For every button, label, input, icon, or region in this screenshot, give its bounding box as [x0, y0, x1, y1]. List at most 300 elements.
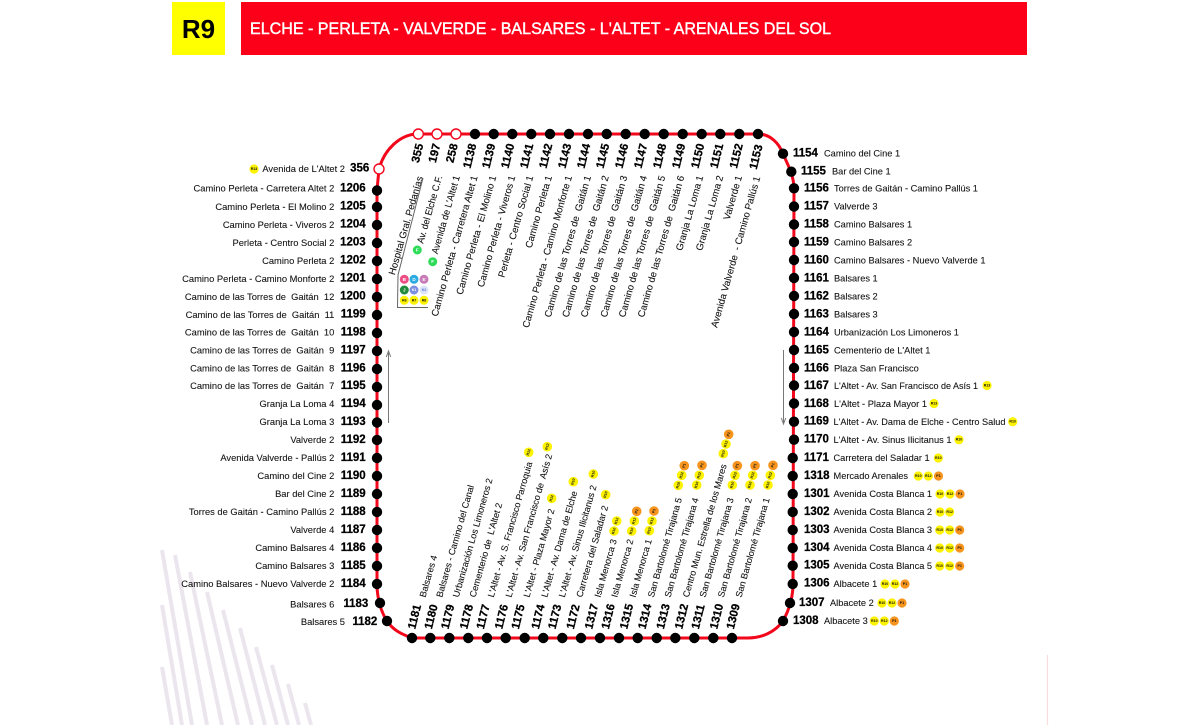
stop 1172: 1172: [565, 603, 583, 630]
stop 1159: 1159: [804, 236, 829, 248]
stop dots bottom: [407, 633, 737, 643]
stop 1187: Valverde 4: [290, 525, 334, 535]
stop 1313: R12: [696, 472, 702, 479]
stop 1202: 1202: [340, 254, 366, 266]
stop 1169: R10: [1009, 420, 1016, 424]
stop 1147: Camino de las Torres de Gaitán 4: [599, 174, 650, 319]
stop 1152: Valverde 1: [722, 174, 745, 221]
stop 1306: [788, 578, 910, 590]
stop 1195: [190, 380, 382, 392]
stop 1305: R10: [936, 564, 943, 568]
stop 1152: [722, 129, 746, 221]
stop 1180: 1180: [423, 603, 441, 630]
stop 1179: Urbanización Los Limoneros 2: [451, 477, 495, 598]
stop 1313: R10: [694, 481, 700, 489]
stop 1201: Camino Perleta - Camino Monforte 2: [182, 274, 334, 284]
stop 1188: 1188: [341, 506, 366, 518]
stop 1190: [257, 470, 382, 482]
stop 1303: R12: [946, 528, 953, 532]
stop 1172: R10: [603, 491, 609, 498]
stop 1155: [786, 166, 891, 178]
stop 1150: 1150: [690, 143, 707, 170]
stop 1176: 1176: [493, 603, 511, 630]
top row stops: [387, 129, 766, 329]
stop 1156: Torres de Gaitán - Camino Pallús 1: [834, 184, 978, 194]
stop 1301: R12: [947, 492, 953, 496]
stop 1186: Camino Balsares 4: [255, 543, 334, 553]
stop 1191: Avenida Valverde - Pallús 2: [220, 453, 334, 463]
stop 1163: Balsares 3: [834, 310, 878, 320]
stop 1167: L'Altet - Av. San Francisco de Asís 1: [834, 381, 978, 391]
stop 1310: R10: [747, 481, 753, 489]
stop 1206: Camino Perleta - Carretera Altet 2: [194, 184, 334, 194]
hospital connections box: [398, 178, 428, 308]
stop 1307: 1307: [799, 597, 825, 609]
title banner: ELCHE - PERLETA - VALVERDE - BALSARES - L'ALTET - ARENALES DEL SOL: [250, 20, 831, 38]
route badge R9: R9: [182, 14, 215, 44]
stop 1201: [182, 272, 382, 284]
stop 1304: R10: [936, 546, 943, 550]
hospital connections box: J: [403, 288, 406, 292]
stop 1312: P1: [726, 432, 731, 437]
stop 1159: Camino Balsares 2: [834, 238, 912, 248]
stop 1306: Albacete 1: [834, 579, 877, 589]
stop 356: R13: [251, 167, 257, 171]
stop 356: [249, 162, 384, 174]
stop 1174: 1174: [530, 603, 548, 630]
hospital connections box: K1: [412, 288, 416, 292]
stop 1172: Carretera del Saladar 2: [574, 504, 610, 598]
stop 1170: L'Altet - Av. Sinus Ilicitanus 1: [834, 435, 952, 445]
stop 1309: P1: [770, 463, 776, 468]
stop 1165: [789, 344, 930, 356]
stop 1147: 1147: [633, 143, 650, 170]
stop 1311: [690, 461, 742, 630]
stop 1307: R12: [889, 601, 895, 605]
stop 1163: 1163: [804, 308, 829, 320]
stop 1177: [475, 448, 535, 630]
stop 1189: Bar del Cine 2: [275, 489, 334, 499]
stop 1158: [789, 218, 912, 230]
stop 1164: Urbanización Los Limoneros 1: [834, 328, 959, 338]
stop 1164: [789, 326, 959, 338]
stop 1145: Camino de las Torres de Gaitán 2: [561, 174, 612, 319]
stop 1198: 1198: [341, 326, 366, 338]
stop 1205: 1205: [340, 201, 366, 213]
stop 1316: P1: [634, 509, 639, 514]
stop 1182: [301, 616, 392, 628]
stop 1313: P1: [699, 463, 705, 468]
stop 1178: 1178: [458, 603, 476, 630]
stop 1191: 1191: [341, 452, 366, 464]
stop 355 Hospital: 355: [410, 142, 426, 164]
stop 1177: R12: [526, 449, 532, 456]
stop 1167: 1167: [804, 380, 829, 392]
stop 1154: [778, 148, 900, 160]
stop 1151: 1151: [709, 142, 726, 170]
stop 1197: [190, 344, 382, 356]
stop 1311: 1311: [690, 603, 708, 630]
stop 1316: R10: [629, 527, 635, 535]
stop 1307: R10: [879, 601, 885, 605]
stop 1181: [406, 554, 439, 630]
stop 1310: San Bartolomé Tirajana 2: [716, 497, 754, 598]
stop 1178: Cementerio de L'Altet 2: [468, 502, 504, 598]
stop 197: Av. del Elche C.F.: [415, 174, 445, 245]
stop 1184: 1184: [341, 578, 366, 590]
stop 1304: 1304: [804, 542, 830, 554]
hospital connections box: E: [422, 277, 426, 282]
stop 1188: Torres de Gaitán - Camino Pallús 2: [189, 507, 334, 517]
stop 1168: 1168: [804, 398, 830, 410]
stop 1168: L'Altet - Plaza Mayor 1: [834, 399, 927, 409]
stop 1199: [186, 308, 382, 320]
hospital connections box: R8: [422, 298, 426, 302]
stop 1305: P1: [957, 564, 962, 568]
right column stops: [778, 148, 1017, 627]
stop 1173: R10: [590, 470, 596, 478]
stop 1314: R10: [675, 482, 681, 489]
stop 1318: R10: [915, 474, 922, 478]
stop 1315: [618, 506, 659, 630]
stop 1138: Camino Perleta - Carretera Altet 1: [430, 174, 481, 318]
stop 1176: R12: [544, 443, 550, 450]
stop 1200: Camino de las Torres de Gaitán 12: [185, 292, 334, 302]
stop 1303: R10: [936, 528, 943, 532]
stop 1311: San Bartolomé Tirajana 3: [698, 497, 736, 598]
stop 1204: Camino Perleta - Viveros 2: [223, 220, 334, 230]
stop 1141: 1141: [519, 142, 536, 170]
stop 1199: Camino de las Torres de Gaitán 11: [186, 310, 334, 320]
stop 1185: 1185: [341, 560, 366, 572]
stop 1158: 1158: [804, 218, 830, 230]
stop 1305: 1305: [804, 560, 830, 572]
stop 1311: P1: [735, 463, 740, 468]
stop 1186: 1186: [341, 542, 366, 554]
route line: [377, 134, 794, 638]
stop 1181: 1181: [406, 603, 424, 630]
stop 1309: 1309: [725, 603, 743, 630]
stop 1194: 1194: [341, 398, 366, 410]
stop 1306: 1306: [804, 578, 830, 590]
stop 1308: [778, 615, 899, 627]
stop 1167: [789, 380, 992, 392]
stop 1162: Balsares 2: [834, 292, 878, 302]
stop 1192: Valverde 2: [290, 435, 334, 445]
stop 1186: [255, 542, 382, 554]
stop 1194: Granja La Loma 4: [260, 399, 334, 409]
stop 1312: R10: [720, 450, 726, 457]
stop 1176: [493, 442, 554, 630]
stop 1161: [789, 272, 878, 284]
stop 1307: Albacete 2: [830, 598, 874, 608]
stop 1172: [565, 490, 610, 630]
stop 1192: [290, 434, 382, 446]
stop 355 Hospital: [387, 129, 426, 276]
stop 1312: Centro Mun. Estrella de los Mares: [681, 463, 729, 598]
route badge R9: [172, 2, 225, 55]
stop 1312: 1312: [673, 603, 691, 630]
stop 1202: Camino Perleta 2: [262, 256, 334, 266]
stop 1166: 1166: [804, 362, 829, 374]
stop 1195: 1195: [341, 380, 366, 392]
stop 355 Hospital: Hospital Gral. Pedanías: [387, 175, 426, 276]
stop 1308: 1308: [793, 615, 819, 627]
stop 258: F: [431, 259, 434, 264]
direction arrow up: [386, 351, 391, 423]
stop 1303: Avenida Costa Blanca 3: [834, 525, 932, 535]
stop 1187: 1187: [341, 524, 366, 536]
stop 1171: 1171: [804, 452, 830, 464]
stop 1153: Avenida Valverde - Camino Pallús 1: [709, 175, 763, 329]
stop 1308: Albacete 3: [824, 616, 868, 626]
stop 1301: R10: [937, 492, 943, 496]
stop 1148: 1148: [652, 142, 669, 170]
stop 1193: 1193: [341, 416, 366, 428]
stop 1204: [223, 219, 382, 231]
stop 1310: P1: [752, 463, 758, 468]
stop 1197: 1197: [341, 344, 366, 356]
stop 1144: 1144: [576, 142, 593, 170]
stop 1177: L'Altet - Av. S. Francisco Parroquia: [486, 460, 535, 598]
stop 1303: P1: [957, 528, 962, 532]
stop 1304: P1: [957, 546, 962, 550]
stop 1308: R12: [881, 619, 888, 623]
stop 1316: R12: [631, 517, 637, 525]
stop 356: 356: [350, 162, 369, 174]
stop 1179: [440, 477, 495, 630]
stop 1192: 1192: [341, 434, 366, 446]
stop 1311: R12: [732, 472, 738, 479]
stop 1156: [789, 182, 978, 194]
stop 1138: 1138: [462, 142, 479, 170]
stop 1157: Valverde 3: [834, 202, 878, 212]
stop 1198: Camino de las Torres de Gaitán 10: [185, 328, 334, 338]
stop 1187: [290, 524, 382, 536]
stop 1206: [194, 182, 382, 196]
stop 1311: R10: [729, 481, 735, 489]
stop 1190: 1190: [341, 470, 366, 482]
stop 1318: R12: [925, 474, 932, 478]
stop 1316: Isla Menorca 2: [609, 538, 636, 598]
stop 1151: [694, 129, 726, 252]
stop 1193: [260, 416, 382, 428]
stop 1309: R10: [765, 481, 771, 489]
stop 1175: L'Altet - Plaza Mayor 2: [522, 508, 557, 598]
stop 1181: Balsares 4: [418, 554, 439, 598]
hospital connections box: D: [412, 277, 416, 282]
stop 1170: 1170: [804, 434, 829, 446]
stop 1306: P1: [903, 582, 907, 586]
stop 1160: [789, 254, 986, 266]
stop 1152: 1152: [728, 143, 746, 170]
stop 1178: [458, 502, 504, 630]
stop 1195: Camino de las Torres de Gaitán 7: [190, 381, 334, 391]
stop 1304: R12: [946, 546, 953, 550]
stop 1168: [789, 398, 939, 410]
stop 1200: [185, 290, 382, 302]
stop 1318: [788, 470, 943, 482]
stop 1170: R10: [956, 438, 962, 442]
stop 1173: [547, 469, 599, 630]
stop 1308: R10: [871, 619, 878, 623]
stop 1157: 1157: [804, 200, 829, 212]
stop 1303: 1303: [804, 524, 830, 536]
stop 1153: 1153: [748, 144, 766, 171]
stop 1306: R10: [882, 582, 888, 586]
stop 1173: L'Altet - Av. Sinus Ilicitanus 2: [557, 484, 599, 598]
stop 1155: Bar del Cine 1: [832, 167, 891, 177]
stop 1315: Isla Menorca 1: [628, 538, 654, 598]
stop 1196: Camino de las Torres de Gaitán 8: [190, 364, 334, 374]
stop 1305: Avenida Costa Blanca 5: [834, 561, 932, 571]
stop 1155: 1155: [801, 166, 827, 178]
stop 1169: L'Altet - Av. Dama de Elche - Centro Salud: [834, 417, 1006, 427]
stop 1139: Camino Perleta - El Molino 1: [455, 174, 499, 296]
stop 1201: 1201: [340, 272, 366, 284]
stop 1317: R10: [611, 527, 617, 535]
stop 1196: 1196: [341, 362, 366, 374]
stop 1315: P1: [651, 508, 657, 514]
stop 1317: R12: [614, 517, 620, 525]
stop 1164: 1164: [804, 326, 830, 338]
stop 1205: Camino Perleta - El Molino 2: [215, 202, 334, 212]
left column stops: [181, 162, 392, 628]
stop 1314: San Bartolomé Tirajana 5: [646, 497, 684, 598]
stop 1142: [524, 129, 555, 249]
stop 1145: 1145: [595, 142, 612, 170]
stop 1171: R10: [935, 456, 942, 460]
stop 1309: [725, 460, 778, 630]
stop 1318: P1: [936, 474, 941, 478]
stop 1190: Camino del Cine 2: [257, 471, 334, 481]
stop 1313: San Bartolomé Tirajana 4: [663, 497, 701, 598]
stop 1301: Avenida Costa Blanca 1: [834, 489, 932, 499]
stop 1185: [255, 560, 382, 572]
stop 1182: Balsares 5: [301, 617, 345, 627]
stop 1305: R12: [946, 564, 953, 568]
stop 1302: R12: [946, 510, 953, 514]
stop 1173: 1173: [547, 603, 564, 630]
stop 1197: Camino de las Torres de Gaitán 9: [190, 346, 334, 356]
stop 1165: Cementerio de L'Altet 1: [834, 346, 930, 356]
stop 1143: 1143: [557, 143, 574, 170]
stop 1310: [708, 461, 760, 630]
stop 1150: [674, 129, 707, 252]
stop 1165: 1165: [804, 344, 830, 356]
bottom row stops: [406, 430, 778, 643]
stop 1315: R10: [646, 527, 652, 534]
stop 1314: [637, 461, 689, 630]
stop 1183: [290, 598, 385, 610]
stop 1148: Camino de las Torres de Gaitán 5: [617, 174, 668, 319]
stop 1302: [788, 506, 954, 518]
stop 1179: 1179: [440, 603, 457, 630]
hospital connections box: R7: [412, 298, 416, 302]
stop 1144: Camino de las Torres de Gaitán 1: [543, 174, 594, 319]
stop 1141: [497, 129, 536, 279]
stop 1304: [788, 542, 964, 554]
stop 258: 258: [445, 142, 461, 164]
stop 1168: R13: [931, 402, 937, 406]
stop 1303: [788, 524, 964, 536]
stop 1171: Carretera del Saladar 1: [834, 453, 930, 463]
stop 1307: P1: [900, 601, 904, 605]
stop 1312: R12: [723, 440, 729, 448]
stop 1167: R13: [984, 384, 990, 388]
stop 1317: 1317: [583, 603, 601, 630]
stop 1202: [262, 254, 382, 266]
stop 1309: San Bartolomé Tirajana 1: [734, 497, 772, 598]
title banner: [241, 2, 1027, 55]
stop 1169: [789, 416, 1017, 428]
stop 1154: 1154: [793, 148, 819, 160]
stop 1166: [789, 362, 919, 374]
stop 1161: Balsares 1: [834, 274, 878, 284]
stop 1318: Mercado Arenales: [834, 471, 908, 481]
stop 1307: [785, 597, 907, 609]
stop 1184: [181, 578, 382, 590]
stop 1182: 1182: [352, 616, 377, 628]
stop 1175: 1175: [510, 603, 528, 630]
stop 1304: Avenida Costa Blanca 4: [834, 543, 932, 553]
stop 1183: Balsares 6: [290, 600, 334, 610]
stop 1149: 1149: [671, 143, 688, 170]
stop 1301: 1301: [804, 488, 830, 500]
stop 258: Avenida de L'Altet 1: [430, 174, 463, 255]
stop 1313: 1313: [655, 603, 673, 630]
stop 1158: Camino Balsares 1: [834, 220, 912, 230]
stop 1203: 1203: [340, 237, 366, 249]
direction arrow down: [781, 350, 786, 424]
stop 1312: [673, 430, 734, 630]
stop 1166: Plaza San Francisco: [834, 364, 919, 374]
stop 1176: L'Altet - Av. San Francisco de Asís 2: [504, 453, 554, 598]
stop 1140: 1140: [500, 143, 517, 170]
stop 1142: Camino Perleta 1: [524, 174, 555, 249]
stop 1180: Balsares - Camino del Canal: [434, 484, 476, 598]
stop 1188: [189, 506, 382, 518]
stop 1157: [789, 200, 878, 212]
stop 1174: L'Altet - Av. Dama de Elche: [539, 490, 579, 598]
stop 1193: Granja La Loma 3: [260, 417, 334, 427]
stop 1184: Camino Balsares - Nuevo Valverde 2: [181, 579, 334, 589]
stop 1310: 1310: [708, 603, 726, 630]
hospital connections box: K2: [422, 288, 426, 292]
stop 1198: [185, 326, 382, 338]
stop 1143: Camino Perleta - Camino Monforte 1: [521, 174, 575, 329]
stop 1174: [530, 477, 579, 630]
stop 1139: 1139: [481, 143, 498, 170]
stop 1161: 1161: [804, 272, 830, 284]
stop 1174: R10: [570, 478, 576, 485]
stop 1149: Camino de las Torres de Gaitán 6: [636, 174, 687, 319]
stop 1203: Perleta - Centro Social 2: [233, 238, 334, 248]
stop 356: Avenida de L'Altet 2: [262, 164, 345, 174]
stop 1196: [190, 362, 382, 374]
stop 1204: 1204: [340, 219, 366, 231]
stop 1162: 1162: [804, 290, 829, 302]
hospital connections box: B: [403, 277, 407, 282]
stop 1314: P1: [682, 463, 687, 468]
stop 1316: [600, 506, 642, 630]
stop 1146: Camino de las Torres de Gaitán 3: [579, 174, 630, 319]
stop 1318: 1318: [804, 470, 830, 482]
stop 1140: Camino Perleta - Viveros 1: [476, 174, 518, 289]
stop 1308: P1: [892, 619, 897, 623]
stop 258: [428, 129, 463, 266]
stop 1206: 1206: [340, 182, 366, 194]
